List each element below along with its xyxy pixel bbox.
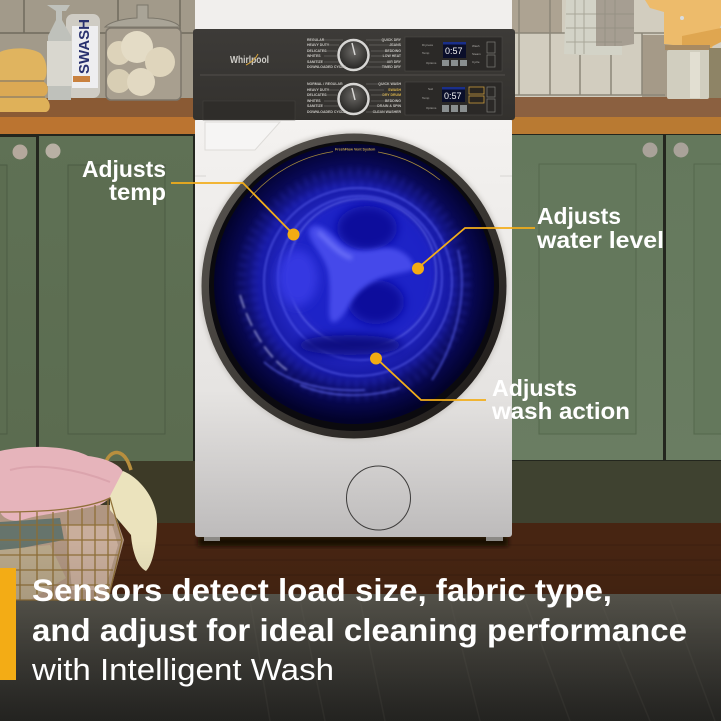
rug [0,594,721,721]
bottom display module: Temp [422,96,430,100]
door ring [202,134,506,438]
dial labels left [307,38,346,114]
brand logo: Whirlpool [230,55,269,66]
top display module [405,37,502,71]
callout: adjusts temp: Adjusts [82,156,166,182]
floor [0,523,721,595]
control panels [193,29,515,120]
drum back [290,201,434,345]
bottom display module: 0:57 [444,91,462,101]
callout: adjusts temp [82,156,300,240]
bottom display module: Soil [428,87,433,91]
dial labels left: REGULAR [307,38,325,42]
decor: hanging yellow shirt [645,0,721,50]
top display module: Dryness [422,43,434,47]
decor: towels [0,48,50,112]
washer door: FreshFlow Vent System [335,148,375,152]
front access panel circle [346,466,410,530]
accent bar [0,568,16,680]
bottom display module [405,82,502,115]
countertop [0,97,721,135]
dial labels left: DOWNLOADED CYCLE [307,110,346,114]
toe kick [0,461,721,524]
dial labels right: BEDDING [385,99,401,103]
dial labels right: AIR DRY [387,60,402,64]
wire mesh [0,498,122,600]
bottom display module: Options [426,106,437,110]
callout: adjusts water level: water level [536,227,664,253]
pink blanket [0,447,124,521]
cabinets [0,134,721,464]
dial labels right: LOW HEAT [383,54,402,58]
decor: hanging plaid shirt [564,0,634,55]
dial labels left: WHITES [307,54,321,58]
dial labels left: DELICATES [307,93,327,97]
dark pockets [278,206,404,355]
dial labels left: WHITES [307,99,321,103]
washer body [195,118,512,537]
dial labels right: DRY DRUM [382,93,401,97]
decor: ceramic canister [665,45,721,99]
dial labels right: TIMED DRY [382,65,402,69]
dial labels right: DRAIN & SPIN [377,104,401,108]
top display module: Cycle [472,60,480,64]
decor: glass jar with dryer balls [105,5,181,100]
basket handle [106,452,131,470]
bottom dial [338,84,368,114]
top display module: 0:57 [445,46,463,56]
top display module: Temp [422,51,430,55]
washer stack [195,0,512,541]
dial labels right: SWASH [388,88,401,92]
top display module: Wash [472,44,480,48]
washer feet [204,537,503,541]
callout: adjusts water level: Adjusts [537,203,621,229]
dial labels left: HEAVY DUTY [307,88,330,92]
dial labels right: BEDDING [385,49,401,53]
detergent drawer [205,122,280,150]
caption: Sensors detect load size, fabric type, [32,572,612,608]
baffle highlight [318,232,352,258]
dryer body [195,0,512,32]
laundry basket [0,447,157,600]
caption: and adjust for ideal cleaning performance [32,612,687,648]
decor: spray bottle and soap: SWASH [76,19,93,74]
dial labels left: NORMAL / REGULAR [307,82,343,86]
callout: adjusts wash action [370,352,630,424]
washer door [200,132,508,440]
dial labels right: JEANS [389,43,402,47]
drum rings [264,188,452,376]
dial labels right: QUICK WASH [378,82,401,86]
cream cloth [110,471,157,571]
dial labels left: DOWNLOADED CYCLE [307,65,346,69]
background: tiled backsplash [0,0,721,100]
dial labels right [373,38,402,114]
basket contents [0,505,124,600]
tri-lobe baffle [309,225,414,322]
door shadow [200,132,508,440]
top display module: Options [426,61,437,65]
dial labels left: SANITIZE [307,60,324,64]
caption [31,572,687,687]
caption: with Intelligent Wash [31,652,334,687]
bottom shading [0,540,721,721]
dial labels right: QUICK DRY [381,38,402,42]
callout: adjusts water level [412,203,664,274]
gold rim arcs [250,152,440,198]
bright lower-left streaks [240,250,462,395]
glass [214,144,494,424]
dial labels left: SANITIZE [307,104,324,108]
dial labels right: CLEAN WASHER [373,110,401,114]
callout: adjusts wash action: wash action [491,398,630,424]
dial labels left: DELICATES [307,49,327,53]
drum swirl streaks [242,172,466,396]
callout: adjusts wash action: Adjusts [492,375,577,401]
top dial [338,40,368,70]
decor: spray bottle and soap [47,5,100,100]
top display module: Steam [472,52,481,56]
dial labels left: HEAVY DUTY [307,43,330,47]
callout: adjusts temp: temp [109,179,166,205]
